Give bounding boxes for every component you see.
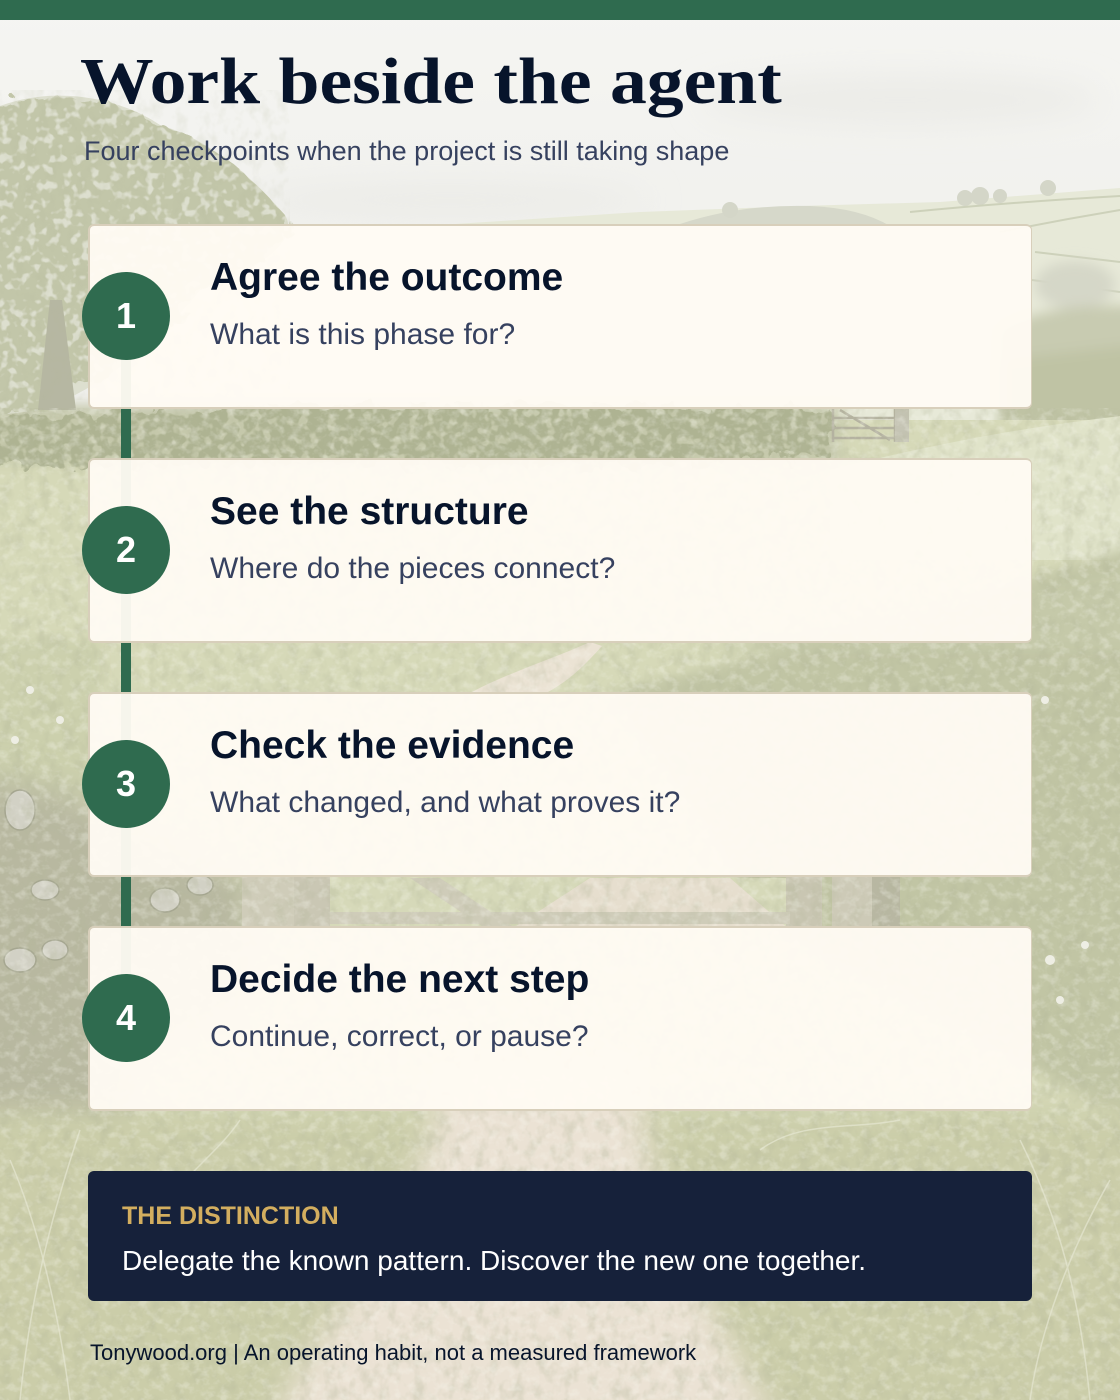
step 3 number badge bbox=[82, 740, 170, 828]
step 4 heading: Decide the next step bbox=[210, 958, 589, 1001]
wooden gate far bbox=[833, 408, 895, 442]
panel: step 4 bbox=[88, 926, 1032, 1111]
step 2 number badge: 2 bbox=[116, 529, 136, 570]
step 1 question: What is this phase for? bbox=[210, 318, 515, 351]
step 1 number badge bbox=[82, 272, 170, 360]
near wooden gate bbox=[242, 876, 900, 930]
callout label: THE DISTINCTION bbox=[122, 1202, 339, 1230]
step 3 question: What changed, and what proves it? bbox=[210, 786, 680, 819]
path receding bbox=[472, 642, 602, 692]
grass blades bbox=[10, 1120, 1110, 1400]
callout text: Delegate the known pattern. Discover the new one together. bbox=[122, 1245, 866, 1276]
step 4 number badge: 4 bbox=[116, 997, 136, 1038]
panel: step 3 bbox=[88, 692, 1032, 877]
step 1 heading: Agree the outcome bbox=[210, 256, 563, 299]
left meadow bbox=[0, 640, 100, 800]
tree left bbox=[0, 96, 288, 420]
step 2 number badge bbox=[82, 506, 170, 594]
texture overlays bbox=[0, 408, 1120, 1400]
callout: the distinction bbox=[88, 1171, 1032, 1301]
step 2 question: Where do the pieces connect? bbox=[210, 552, 615, 585]
hedgerow bbox=[0, 405, 840, 463]
panel: step 2 bbox=[88, 458, 1032, 643]
subtitle: Four checkpoints when the project is still taking shape bbox=[84, 136, 729, 166]
middle and lower ground bbox=[0, 420, 1120, 1400]
step 3 heading: Check the evidence bbox=[210, 724, 574, 767]
step 4 number badge bbox=[82, 974, 170, 1062]
timeline connector bbox=[121, 316, 131, 1018]
step 3 number badge: 3 bbox=[116, 763, 136, 804]
step 1 number badge: 1 bbox=[116, 295, 136, 336]
distant hills bbox=[440, 188, 1120, 440]
stone wall bbox=[0, 770, 250, 1130]
footer: Tonywood.org | An operating habit, not a measured framework bbox=[90, 1340, 696, 1365]
step 4 question: Continue, correct, or pause? bbox=[210, 1020, 589, 1053]
right hedge bbox=[610, 535, 1120, 1150]
top bar bbox=[0, 0, 1120, 20]
bottom grass bbox=[0, 1110, 1120, 1400]
step 2 heading: See the structure bbox=[210, 490, 529, 533]
panel: step 1 bbox=[88, 224, 1032, 409]
far trees right bbox=[1000, 261, 1120, 440]
title: Work beside the agent bbox=[80, 45, 782, 118]
